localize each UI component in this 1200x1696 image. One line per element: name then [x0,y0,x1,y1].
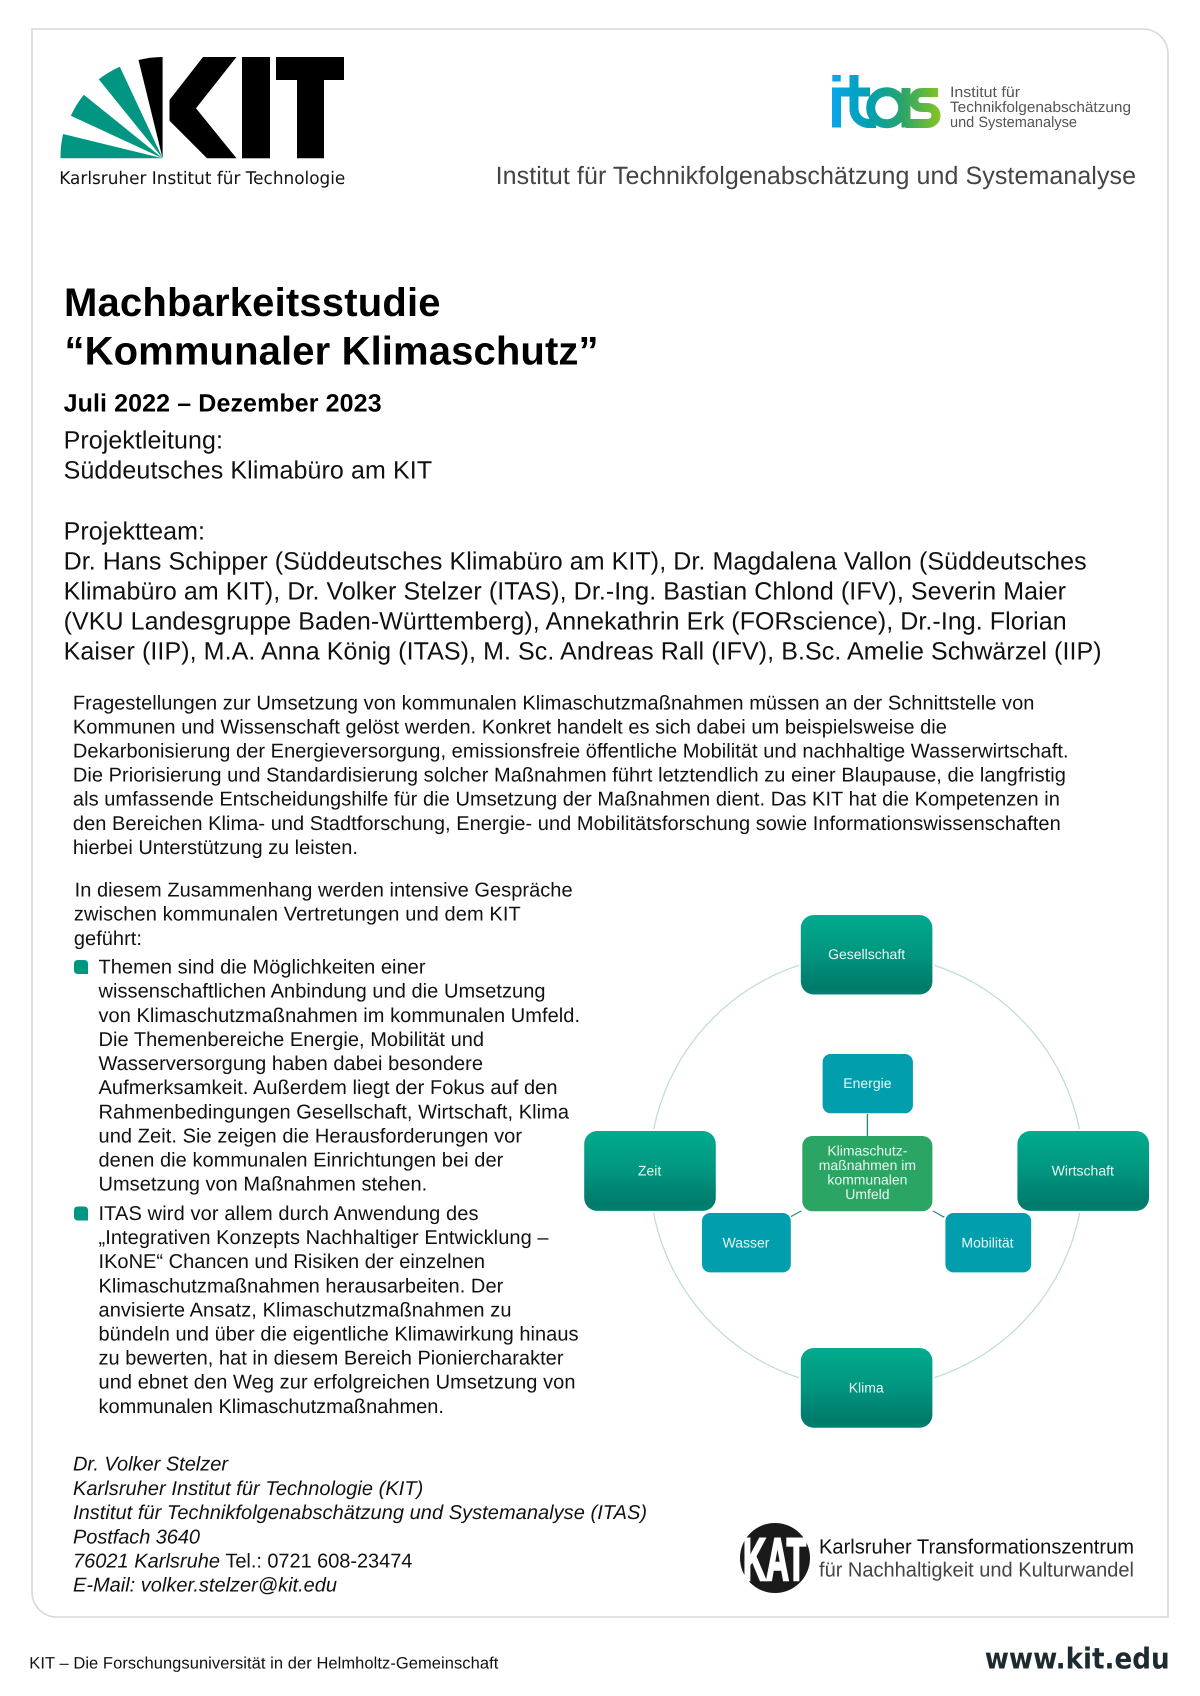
intro paragraph: Die Priorisierung und Standardisierung solcher Maßnahmen führt letztendlich zu einer Blaupause, die langfristig [73,765,1066,787]
bullet text: und Zeit. Sie zeigen die Herausforderungen vor [98,1125,522,1147]
node: Energie [823,1054,913,1113]
KAT subtitle: für Nachhaltigkeit und Kulturwandel [819,1559,1134,1582]
contact block: E-Mail: volker.stelzer@kit.edu [73,1575,337,1597]
node: Wirtschaft [1017,1131,1149,1211]
intro paragraph [73,692,1069,859]
icon: itas wordmark [832,75,938,128]
project lead: Süddeutsches Klimabüro am KIT [64,457,432,485]
intro paragraph: Dekarbonisierung der Energieversorgung, emissionsfreie öffentliche Mobilität und nachhaltige Wasserwirtschaft. [73,741,1069,763]
bullet text: Die Themenbereiche Energie, Mobilität und [98,1029,484,1051]
node: Wirtschaft: Wirtschaft [1052,1162,1114,1178]
itas logo text: und Systemanalyse [950,114,1077,131]
node: Mobilität: Mobilität [961,1234,1014,1250]
contact block: Tel.: 0721 608-23474 [225,1550,412,1572]
node: Wasser: Wasser [723,1234,770,1250]
title: Machbarkeitsstudie [64,281,440,325]
logo: KIT [59,57,345,189]
project team: Dr. Hans Schipper (Süddeutsches Klimabüro am KIT), Dr. Magdalena Vallon (Süddeutsches [64,547,1087,575]
bullet text: wissenschaftlichen Anbindung und die Umsetzung [98,981,546,1003]
project team [64,517,1102,666]
contact block: Institut für Technikfolgenabschätzung und Systemanalyse (ITAS) [73,1502,647,1524]
bullet text: anvisierte Ansatz, Klimaschutzmaßnahmen zu [98,1299,512,1321]
bullet: Themen [74,956,580,1196]
icon: KAT badge [740,1523,810,1593]
lead-in paragraph: zwischen kommunalen Vertretungen und dem KIT [74,904,521,926]
node: Zeit: Zeit [638,1162,661,1178]
node: Klima: Klima [849,1379,884,1395]
project dates: Juli 2022 – Dezember 2023 [64,389,382,417]
footer: website: www.kit.edu [985,1641,1170,1675]
icon: KIT letters [170,57,344,158]
icon: bullet square [74,1206,88,1220]
intro paragraph: hierbei Unterstützung zu leisten. [73,837,358,859]
lead-in paragraph: In diesem Zusammenhang werden intensive Gespräche [75,880,573,902]
bullet text: Rahmenbedingungen Gesellschaft, Wirtschaft, Klima [98,1101,570,1123]
contact block: Karlsruher Institut für Technologie (KIT) [73,1478,423,1500]
node: Klimaschutzmaßnahmen centre: maßnahmen im [819,1157,916,1173]
project team: Kaiser (IIP), M.A. Anna König (ITAS), M. Sc. Andreas Rall (IFV), B.Sc. Amelie Schwärzel (IIP) [64,638,1102,666]
project lead: Projektleitung: [64,427,223,455]
title: “Kommunaler Klimaschutz” [64,329,598,373]
bullet text: ITAS wird vor allem durch Anwendung des [98,1203,478,1225]
KAT name: Karlsruher Transformationszentrum [819,1535,1134,1558]
node: Gesellschaft [801,915,932,994]
itas logo text [950,84,1131,131]
diagram ring [650,954,1084,1388]
node: Wasser [702,1213,791,1272]
logo: ITAS [832,75,1131,131]
bullet: ITAS [74,1203,578,1418]
project team: Projektteam: [64,517,205,545]
contact block: Postfach 3640 [73,1526,200,1548]
title [64,281,598,373]
bullet text [98,956,580,1196]
project team: Klimabüro am KIT), Dr. Volker Stelzer (ITAS), Dr.-Ing. Bastian Chlond (IFV), Severin Maier [64,577,1066,605]
institute name: Institut für Technikfolgenabschätzung und Systemanalyse [496,162,1136,190]
bullet text: Themen sind die Möglichkeiten einer [98,956,426,978]
project lead [64,427,432,485]
bullet text: von Klimaschutzmaßnahmen im kommunalen Umfeld. [98,1005,580,1027]
bullet text: denen die kommunalen Einrichtungen bei der [98,1150,504,1172]
diagram: Klimaschutz cycle [584,915,1149,1428]
node: Klima [801,1348,932,1428]
bullet text: Aufmerksamkeit. Außerdem liegt der Fokus auf den [98,1077,558,1099]
node: Energie: Energie [843,1075,892,1091]
node: Zeit [584,1131,716,1211]
node: Klimaschutzmaßnahmen centre: kommunalen [827,1172,907,1188]
bullet text: bündeln und über die eigentliche Klimawirkung hinaus [98,1323,578,1345]
bullet text: Umsetzung von Maßnahmen stehen. [98,1174,427,1196]
itas logo text: Institut für [950,84,1020,101]
footer: tagline: KIT – Die Forschungsuniversität in der Helmholtz-Gemeinschaft [29,1654,499,1672]
bullet text: zu bewerten, hat in diesem Bereich Pioniercharakter [98,1348,564,1370]
bullet text: und ebnet den Weg zur erfolgreichen Umsetzung von [98,1372,576,1394]
itas logo text: Technikfolgenabschätzung [950,99,1131,116]
connector: Mobilität [933,1211,944,1217]
node: Gesellschaft: Gesellschaft [828,946,905,962]
logo: KAT [740,1523,1134,1593]
bullet text: „Integrativen Konzepts Nachhaltiger Entwicklung – [98,1227,549,1249]
connector: Energie [866,1114,868,1136]
intro paragraph: Kommunen und Wissenschaft gelöst werden. Konkret handelt es sich dabei um beispielsweise die [73,716,947,738]
bullet text: Klimaschutzmaßnahmen herausarbeiten. Der [98,1275,504,1297]
intro paragraph: als umfassende Entscheidungshilfe für die Umsetzung der Maßnahmen dient. Das KIT hat die Kompetenzen in [73,789,1060,811]
bullet text [98,1203,578,1418]
icon: KAT badge: KAT [743,1526,806,1593]
node: Klimaschutzmaßnahmen centre: Klimaschutz- [827,1143,908,1159]
intro paragraph: den Bereichen Klima- und Stadtforschung, Energie- und Mobilitätsforschung sowie Informationswissenschaften [73,813,1061,835]
node: Klimaschutzmaßnahmen centre [802,1136,932,1211]
connector: Wasser [791,1211,802,1217]
node: Mobilität [945,1213,1031,1272]
node: Klimaschutzmaßnahmen centre: Umfeld [845,1186,890,1202]
project team: (VKU Landesgruppe Baden-Württemberg), Annekathrin Erk (FORscience), Dr.-Ing. Florian [64,607,1067,635]
lead-in paragraph [74,880,573,950]
contact block [73,1454,647,1597]
lead-in paragraph: geführt: [74,928,142,950]
contact block: Dr. Volker Stelzer [73,1454,229,1476]
bullet text: kommunalen Klimaschutzmaßnahmen. [98,1396,444,1418]
icon: KIT fan [60,57,163,158]
icon: bullet square [74,960,88,974]
intro paragraph: Fragestellungen zur Umsetzung von kommunalen Klimaschutzmaßnahmen müssen an der Schnittstelle von [73,692,1034,714]
logo caption: Karlsruher Institut für Technologie [59,169,345,189]
bullet text: Wasserversorgung haben dabei besondere [98,1053,483,1075]
bullet text: IKoNE“ Chancen und Risiken der einzelnen [98,1251,485,1273]
contact block: 76021 Karlsruhe [73,1550,220,1572]
